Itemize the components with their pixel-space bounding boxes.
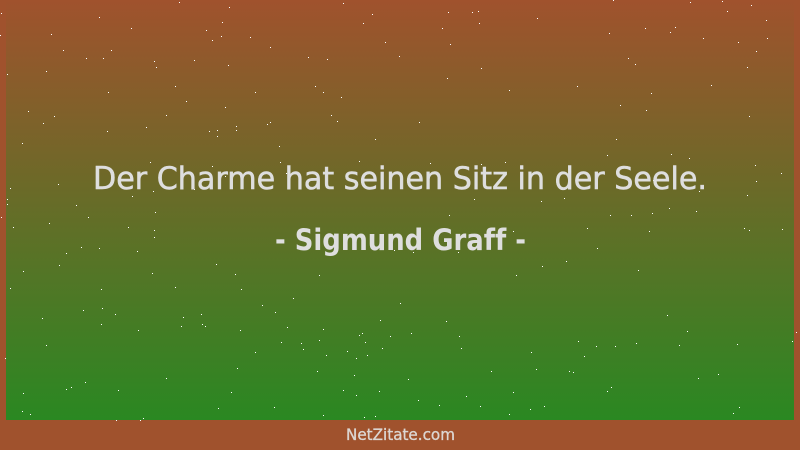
footer brand: NetZitate.com [346, 425, 455, 444]
quote text: Der Charme hat seinen Sitz in der Seele. [93, 161, 707, 197]
author: - Sigmund Graff - [275, 223, 526, 257]
